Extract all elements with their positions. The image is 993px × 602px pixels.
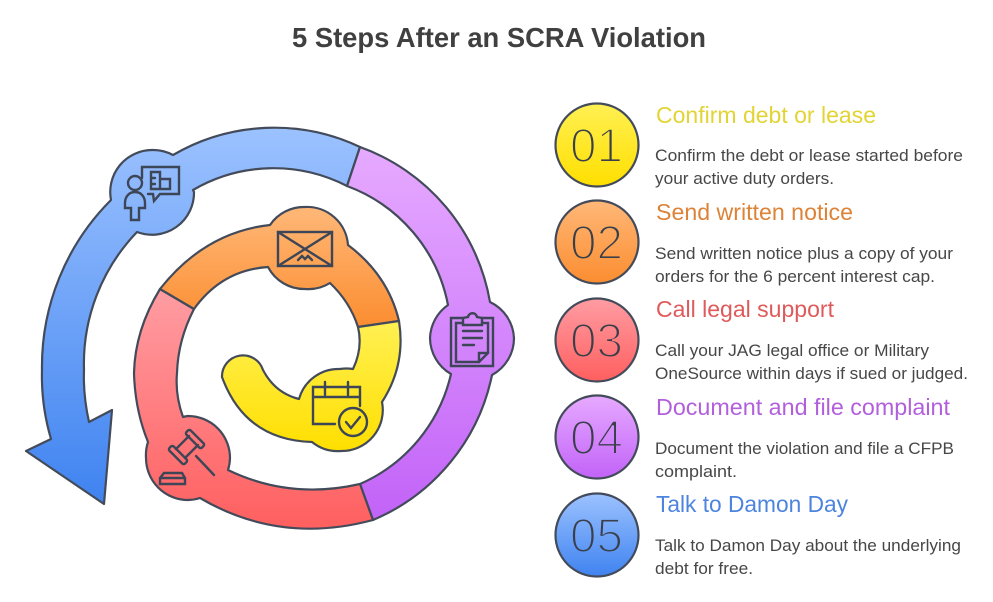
step 05 bbox=[556, 491, 961, 578]
description 05: Talk to Damon Day about the underlying bbox=[655, 537, 961, 555]
heading 01: Confirm debt or lease bbox=[656, 102, 876, 128]
number badge 01 bbox=[556, 104, 638, 186]
heading 02: Send written notice bbox=[656, 199, 853, 225]
title: 5 Steps After an SCRA Violation bbox=[292, 22, 706, 53]
heading 05: Talk to Damon Day bbox=[656, 491, 848, 517]
description 01: your active duty orders. bbox=[655, 170, 834, 188]
description 01 bbox=[655, 147, 963, 188]
description 02: orders for the 6 percent interest cap. bbox=[655, 268, 935, 286]
icon: envelope bbox=[278, 232, 332, 266]
description 03 bbox=[655, 342, 968, 383]
step 03 bbox=[556, 296, 968, 383]
description 05 bbox=[655, 537, 961, 578]
number badge 05 bbox=[556, 494, 638, 576]
icon: person with speech bubble bbox=[125, 167, 179, 220]
icon: gavel bbox=[160, 429, 214, 484]
spiral diagram bbox=[26, 128, 514, 529]
icon: clipboard bbox=[451, 313, 493, 366]
icon: calendar with check bbox=[313, 382, 367, 436]
number badge 05: 05 bbox=[570, 510, 623, 563]
number badge 01: 01 bbox=[570, 120, 623, 173]
description 03: OneSource within days if sued or judged. bbox=[655, 365, 968, 383]
step 04 bbox=[556, 394, 954, 481]
description 04 bbox=[655, 440, 954, 481]
step 01 bbox=[556, 102, 963, 188]
heading 04: Document and file complaint bbox=[656, 394, 951, 420]
description 03: Call your JAG legal office or Military bbox=[655, 342, 930, 360]
description 04: complaint. bbox=[655, 463, 737, 481]
number badge 03: 03 bbox=[570, 315, 623, 368]
spiral segment: orange bbox=[160, 207, 399, 327]
spiral segment: yellow bbox=[222, 321, 401, 451]
number badge 03 bbox=[556, 298, 638, 382]
description 05: debt for free. bbox=[655, 560, 753, 578]
number badge 02: 02 bbox=[570, 217, 623, 270]
spiral segment: blue arrow bbox=[26, 128, 360, 504]
number badge 02 bbox=[556, 200, 638, 284]
spiral segment: red bbox=[134, 289, 373, 529]
step 02 bbox=[556, 199, 954, 286]
description 01: Confirm the debt or lease started before bbox=[655, 147, 963, 165]
description 02: Send written notice plus a copy of your bbox=[655, 245, 954, 263]
description 02 bbox=[655, 245, 954, 286]
number badge 04: 04 bbox=[570, 412, 623, 465]
spiral segment: purple bbox=[347, 147, 514, 520]
heading 03: Call legal support bbox=[656, 296, 835, 322]
number badge 04 bbox=[556, 396, 638, 478]
description 04: Document the violation and file a CFPB bbox=[655, 440, 954, 458]
